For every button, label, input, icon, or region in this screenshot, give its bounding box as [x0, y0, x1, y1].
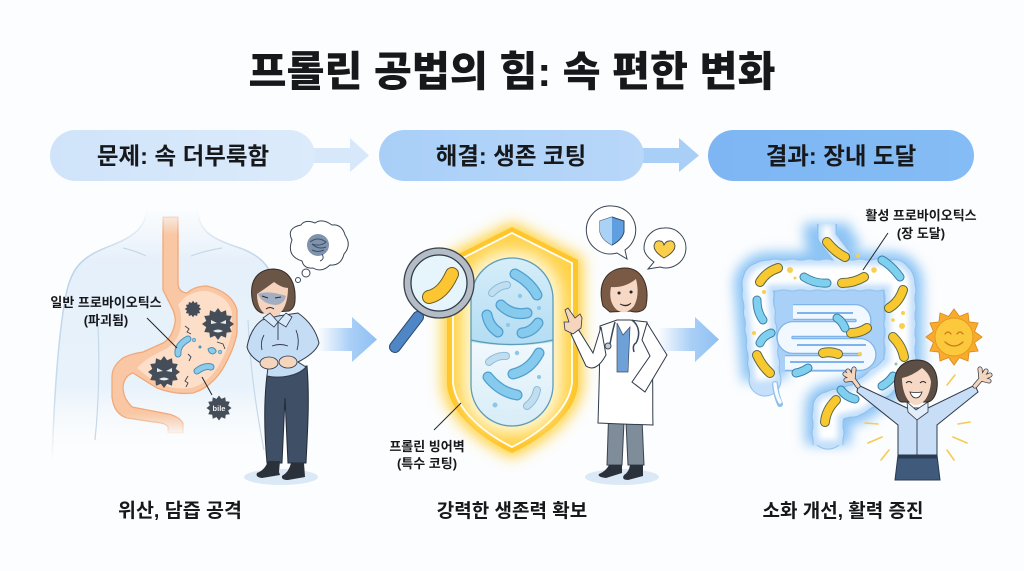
header: solution pill	[379, 130, 644, 181]
doctor	[564, 268, 667, 485]
yellow probiotics	[757, 242, 904, 422]
label: active probiotics: 활성 프로바이오틱스	[865, 208, 977, 223]
header: problem pill	[50, 130, 315, 181]
torso outline	[52, 210, 292, 462]
header: problem pill: 문제: 속 더부룩함	[97, 143, 269, 169]
arrow: panel one to two	[318, 317, 377, 362]
label pointer line	[434, 403, 461, 430]
arrow: solution to result	[630, 138, 699, 172]
probiotic capsule	[471, 258, 553, 426]
intestine glow	[757, 223, 900, 445]
suffering woman	[244, 269, 319, 485]
panel: solution illustration	[389, 206, 686, 485]
soft tube highlight	[757, 226, 900, 440]
shield glow	[442, 222, 583, 458]
gold shield	[447, 227, 578, 453]
celebration rays	[865, 375, 970, 460]
collar bones	[95, 248, 264, 450]
large intestine	[757, 224, 900, 445]
caption: result: 소화 개선, 활력 증진	[763, 500, 923, 522]
label: destroyed probiotics: (파괴됨)	[84, 313, 128, 328]
pathogen cells	[148, 301, 234, 388]
label pointer line	[863, 233, 888, 270]
label: proline barrier	[389, 439, 465, 471]
thought bubble	[290, 221, 348, 282]
speech bubble: heart	[644, 228, 686, 269]
caption: problem: 위산, 담즙 공격	[118, 500, 242, 522]
label: destroyed probiotics: 일반 프로바이오틱스	[50, 295, 162, 310]
bile badge: bile	[213, 404, 225, 413]
magnifying glass	[395, 248, 474, 347]
damaged probiotics	[178, 326, 225, 387]
stomach	[112, 217, 237, 433]
header: result pill: 결과: 장내 도달	[766, 143, 916, 169]
speech bubble: shield	[586, 206, 636, 259]
label: proline barrier: 프롤린 빙어벽	[389, 439, 465, 454]
probiotic pointer line	[147, 318, 212, 395]
panel: problem illustration	[50, 210, 348, 485]
inner gut area	[775, 288, 883, 372]
bile badge	[206, 396, 232, 420]
panel: result illustration	[752, 208, 990, 480]
happy woman	[845, 360, 990, 480]
arrow: panel two to three	[658, 317, 719, 362]
header: solution pill: 해결: 생존 코팅	[436, 143, 586, 169]
small intestine	[784, 312, 868, 363]
label: destroyed probiotics	[50, 295, 162, 328]
nutrient dots	[752, 254, 905, 366]
label: active probiotics	[865, 208, 977, 241]
header: result pill	[708, 130, 974, 181]
label: proline barrier: (특수 코팅)	[397, 456, 457, 471]
label: active probiotics: (장 도달)	[897, 226, 945, 241]
smiling sun	[926, 309, 982, 365]
blue probiotics	[757, 260, 900, 399]
title: 프롤린 공법의 힘: 속 편한 변화	[248, 49, 776, 95]
caption: solution: 강력한 생존력 확보	[437, 500, 587, 522]
arrow: problem to solution	[300, 138, 369, 172]
